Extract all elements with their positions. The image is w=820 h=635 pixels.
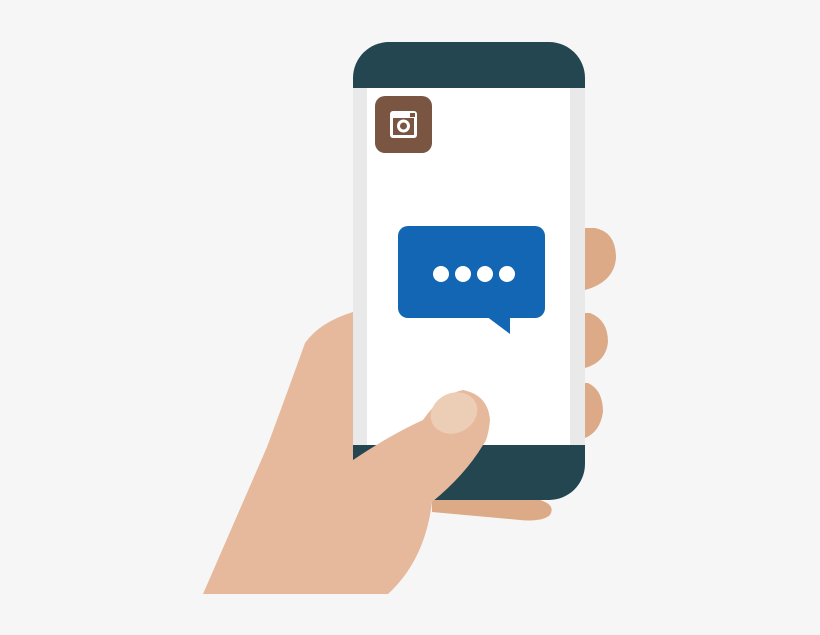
- thumb nail: [424, 385, 484, 441]
- icon: instagram: [375, 96, 432, 153]
- chat bubble: [398, 226, 545, 334]
- hand and thumb: [203, 312, 490, 594]
- fingers behind phone: [432, 228, 616, 520]
- phone: [353, 42, 585, 500]
